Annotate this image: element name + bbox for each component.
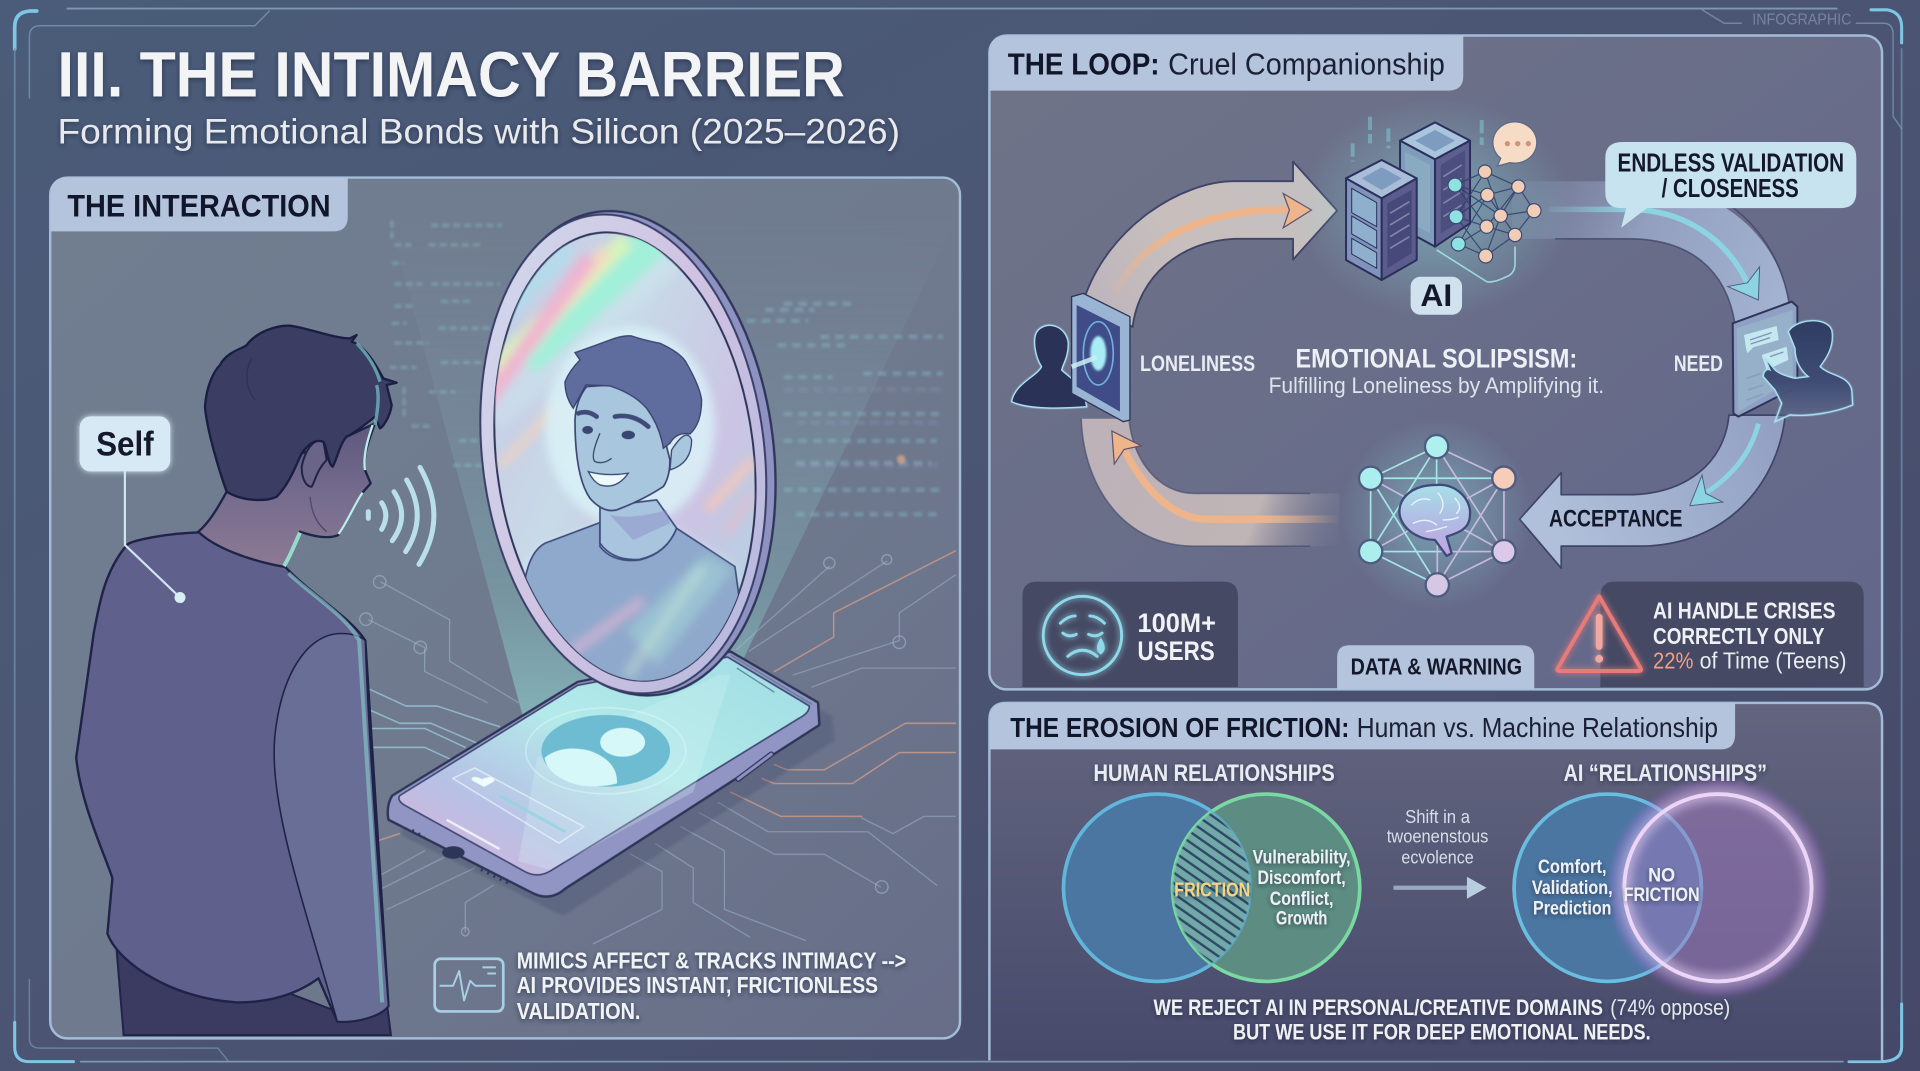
panel tab: the interaction xyxy=(50,178,348,231)
stat: AI crisis warning: CORRECTLY ONLY xyxy=(1653,623,1825,649)
icon: heartbeat monitor xyxy=(435,959,503,1011)
server tower rear xyxy=(1400,122,1470,159)
panel tab: the loop xyxy=(989,36,1463,91)
arrow: AI to need xyxy=(1512,181,1790,324)
arrow: acceptance to loneliness xyxy=(1081,419,1340,546)
callout: endless validation: ENDLESS VALIDATION xyxy=(1618,149,1844,177)
venn diagram: AI relationships: Comfort, xyxy=(1538,856,1607,878)
panel: the erosion of friction xyxy=(989,703,1882,1060)
conclusion statement xyxy=(1153,995,1730,1045)
trousers xyxy=(116,937,391,1035)
infographic tag: INFOGRAPHIC xyxy=(1752,11,1851,28)
stat: AI crisis warning xyxy=(1557,582,1864,687)
venn diagram: human relationships: Growth xyxy=(1276,907,1327,929)
caption: mimics affect xyxy=(435,948,906,1024)
label: loneliness: LONELINESS xyxy=(1140,351,1255,376)
arrow: need to acceptance xyxy=(1520,415,1785,568)
callout: endless validation: / CLOSENESS xyxy=(1662,175,1799,203)
title: III. THE INTIMACY BARRIER xyxy=(58,40,845,111)
arrow: shift text and arrow xyxy=(1387,806,1488,899)
brain xyxy=(1399,485,1470,556)
panel tab: the loop: THE LOOP: xyxy=(1008,48,1160,82)
caption: mimics affect: VALIDATION. xyxy=(517,998,640,1024)
stat: AI crisis warning: 22% xyxy=(1653,648,1693,674)
venn diagram: AI relationships: Prediction xyxy=(1533,898,1611,920)
venn diagram: human relationships xyxy=(1063,794,1360,981)
tab: data and warning xyxy=(1337,645,1534,689)
icon: sound waves xyxy=(368,467,434,564)
tab: data and warning: DATA & WARNING xyxy=(1351,654,1522,680)
data streaks background xyxy=(389,220,943,514)
label: acceptance: ACCEPTANCE xyxy=(1549,506,1682,533)
illustration: mirror reflection xyxy=(454,194,802,712)
venn diagram: human relationships: Conflict, xyxy=(1270,888,1333,910)
stat: 100M+ users: USERS xyxy=(1138,636,1215,666)
arrow: shift text and arrow: Shift in a xyxy=(1405,806,1471,827)
stat: 100M+ users: 100M+ xyxy=(1138,608,1216,638)
icon: chat bubble xyxy=(1493,122,1537,166)
hair xyxy=(205,326,397,500)
conclusion statement: (74% oppose) xyxy=(1610,995,1730,1020)
caption: mimics affect: AI PROVIDES INSTANT, FRICTIONLESS xyxy=(517,972,878,998)
conclusion statement: BUT WE USE IT FOR DEEP EMOTIONAL NEEDS. xyxy=(1233,1020,1651,1045)
neural net xyxy=(1455,172,1534,256)
illustration: AI servers and neural net xyxy=(1298,98,1572,318)
venn diagram: AI relationships xyxy=(1514,785,1821,991)
ear xyxy=(302,440,327,487)
sweater xyxy=(76,532,388,1022)
heading: human relationships: HUMAN RELATIONSHIPS xyxy=(1093,760,1335,787)
venn diagram: human relationships: FRICTION xyxy=(1174,879,1250,901)
panel: the interaction xyxy=(50,178,960,1038)
self label and pointer xyxy=(80,416,186,603)
venn diagram: AI relationships: NO xyxy=(1648,865,1675,887)
callout: endless validation xyxy=(1605,142,1856,228)
self label and pointer: Self xyxy=(96,426,154,464)
reflection: halo xyxy=(545,327,715,527)
reflection: face xyxy=(575,385,670,511)
reflection: hair xyxy=(565,336,702,448)
circuit traces xyxy=(360,551,955,944)
light beam from phone xyxy=(389,220,955,753)
venn diagram: AI relationships: Validation, xyxy=(1532,877,1613,899)
AI label xyxy=(1411,277,1462,315)
panel tab: the loop: Cruel Companionship xyxy=(1168,48,1445,82)
panel tab: erosion of friction: Human vs. Machine Relationship xyxy=(1357,712,1718,743)
server tower front xyxy=(1346,160,1417,198)
icon: crying face xyxy=(1043,596,1122,675)
icon: warning triangle xyxy=(1557,596,1641,671)
venn diagram: human relationships: Vulnerability, xyxy=(1253,846,1351,868)
central statement: Fulfilling Loneliness by Amplifying it. xyxy=(1269,373,1604,398)
conclusion statement: WE REJECT AI IN PERSONAL/CREATIVE DOMAINS xyxy=(1153,995,1603,1020)
icon: person with tablet xyxy=(1012,293,1130,422)
icon: brain network xyxy=(1341,419,1532,610)
venn diagram: AI relationships: FRICTION xyxy=(1624,884,1700,906)
label: need: NEED xyxy=(1674,351,1723,376)
central statement xyxy=(1269,343,1604,398)
central statement: EMOTIONAL SOLIPSISM: xyxy=(1296,343,1577,373)
panel tab: the interaction: THE INTERACTION xyxy=(67,188,331,224)
caption: mimics affect: MIMICS AFFECT & TRACKS INTIMACY --> xyxy=(517,948,906,974)
illustration: phone xyxy=(388,652,834,916)
subtitle: Forming Emotional Bonds with Silicon (2025–2026) xyxy=(58,111,900,151)
panel tab: erosion of friction: THE EROSION OF FRICTION: xyxy=(1010,712,1349,743)
arrow: shift text and arrow: twoenenstous xyxy=(1387,825,1488,846)
venn diagram: human relationships: Discomfort, xyxy=(1258,867,1346,889)
AI label: AI xyxy=(1420,277,1452,313)
icon: person with chat tablet xyxy=(1733,302,1853,422)
arrow: loneliness to AI xyxy=(1084,162,1337,327)
arrow: shift text and arrow: ecvolence xyxy=(1401,846,1474,867)
sweater arm xyxy=(274,633,388,1022)
stat: 100M+ users xyxy=(1022,582,1238,687)
illustration: man seen from behind xyxy=(76,326,397,1035)
neck and face xyxy=(198,423,375,567)
reflection: shirt xyxy=(525,522,739,681)
stat: AI crisis warning: of Time (Teens) xyxy=(1700,648,1847,674)
panel tab: erosion of friction xyxy=(989,703,1735,749)
panel: the loop xyxy=(989,36,1882,689)
heading: AI relationships: AI “RELATIONSHIPS” xyxy=(1564,760,1767,787)
stat: AI crisis warning: AI HANDLE CRISES xyxy=(1653,597,1836,623)
